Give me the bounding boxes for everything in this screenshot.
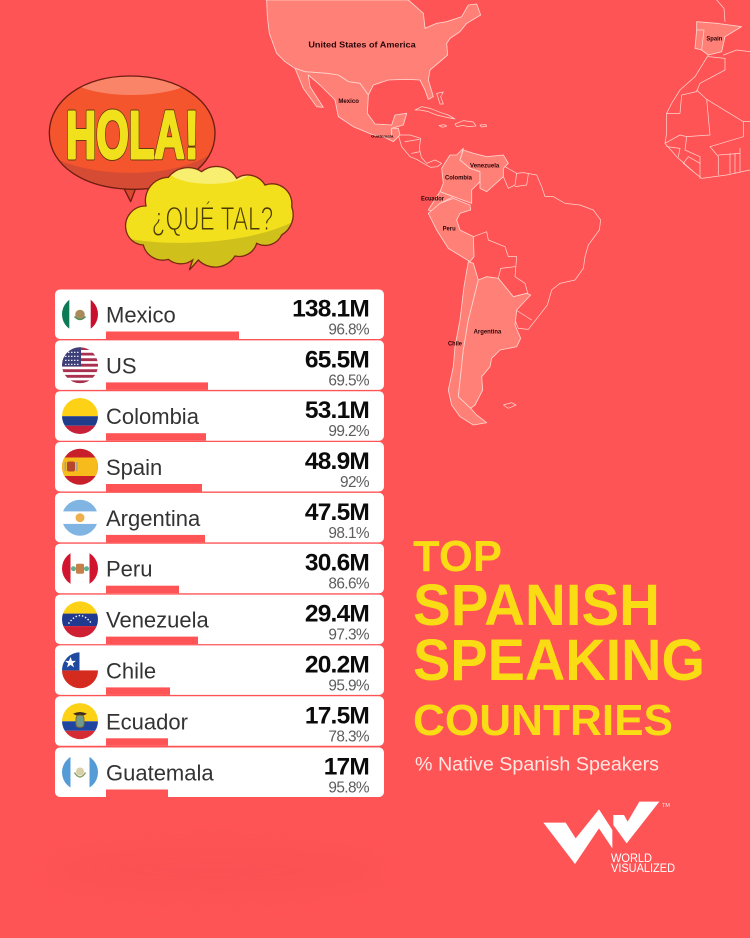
row: Spain: Spain <box>106 455 162 480</box>
label: Chile: Chile <box>448 341 463 347</box>
row: Peru: 30.6M <box>305 550 369 577</box>
label: Argentina: Argentina <box>474 329 502 335</box>
row: Peru: 86.6% <box>328 576 370 593</box>
row: Ecuador <box>55 696 384 746</box>
row: Peru: Peru <box>106 557 152 582</box>
unhighlighted country borders <box>266 0 750 408</box>
row: Mexico: 138.1M <box>292 296 369 322</box>
Peru <box>428 198 474 262</box>
map labels <box>308 36 723 347</box>
Argentina <box>458 277 531 408</box>
row: Guatemala: 17M <box>324 754 369 780</box>
row: Venezuela: 29.4M <box>305 601 369 628</box>
row: Chile: 20.2M <box>305 651 369 678</box>
bubble: Hola <box>48 75 216 202</box>
flag: Ecuador <box>62 702 98 741</box>
title line: SPEAKING: SPEAKING <box>413 628 705 693</box>
title line: COUNTRIES: COUNTRIES <box>413 696 673 745</box>
flag: Argentina <box>62 499 98 537</box>
row: Mexico: 96.8% <box>328 322 370 338</box>
row: Mexico: Mexico <box>106 302 176 328</box>
row: Spain: 92% <box>340 474 370 491</box>
map of the Americas and Spain <box>266 0 750 425</box>
row: Chile: Chile <box>106 658 156 683</box>
subtitle: % Native Spanish Speakers <box>415 754 659 776</box>
row: Colombia: 99.2% <box>328 423 370 440</box>
text: HOLA!: HOLA! <box>66 99 199 173</box>
row: US: 65.5M <box>305 346 369 373</box>
title line: TOP: TOP <box>413 532 502 581</box>
row: Colombia: 53.1M <box>305 397 369 424</box>
row: Ecuador: 17.5M <box>305 702 369 729</box>
Venezuela <box>460 150 508 192</box>
row: Argentina: Argentina <box>106 506 201 531</box>
Ecuador <box>428 192 453 212</box>
row: Argentina <box>55 493 384 542</box>
logo: World Visualized: VISUALIZED <box>611 863 675 875</box>
label: Venezuela: Venezuela <box>470 163 500 169</box>
row: Guatemala: 95.8% <box>328 780 370 796</box>
row: Peru <box>55 544 384 593</box>
flag: Peru <box>62 553 98 584</box>
row: Venezuela: 97.3% <box>328 627 370 644</box>
label: Colombia: Colombia <box>445 175 473 181</box>
row: US: US <box>106 353 137 378</box>
flag: Venezuela <box>62 601 98 639</box>
logo: World Visualized <box>543 802 675 875</box>
label: Mexico: Mexico <box>338 99 359 105</box>
title line: SPANISH: SPANISH <box>413 573 660 638</box>
text: Que tal: ¿QUÉ TAL? <box>152 201 273 238</box>
row: Colombia: Colombia <box>106 404 200 429</box>
Mexico <box>295 68 407 140</box>
row: US: 69.5% <box>328 372 370 389</box>
flag: Mexico <box>62 300 98 329</box>
row: US <box>55 340 384 390</box>
United States <box>267 0 481 99</box>
row: Chile: 95.9% <box>328 677 370 694</box>
title <box>413 532 705 745</box>
Spain <box>695 22 742 55</box>
Chile <box>448 262 487 425</box>
logo: World Visualized: TM <box>662 803 670 809</box>
flag: Chile <box>62 651 98 690</box>
row: Venezuela <box>55 595 384 644</box>
flag: US <box>62 346 98 384</box>
Guatemala <box>383 128 400 142</box>
label: Guatemala: Guatemala <box>371 134 394 139</box>
row: Spain: 48.9M <box>305 448 369 475</box>
row: Venezuela: Venezuela <box>106 608 210 633</box>
label: Spain: Spain <box>706 36 723 42</box>
row: Argentina: 98.1% <box>328 525 370 542</box>
row: Colombia <box>55 391 384 441</box>
label: Peru: Peru <box>443 226 456 232</box>
row: Spain <box>55 442 384 492</box>
logo: World Visualized: WORLD <box>611 853 652 865</box>
Colombia <box>440 148 480 203</box>
row: Guatemala: Guatemala <box>106 760 214 786</box>
bubble: Que tal <box>124 166 294 270</box>
row: Chile <box>55 645 384 695</box>
speech bubbles illustration <box>48 75 294 270</box>
ranking table <box>55 290 384 797</box>
flag: Guatemala <box>62 757 98 788</box>
label: Ecuador: Ecuador <box>421 197 445 203</box>
row: Mexico <box>55 290 384 339</box>
row: Ecuador: 78.3% <box>328 728 370 745</box>
label: United States of America: United States of America <box>308 39 416 49</box>
row: Argentina: 47.5M <box>305 499 369 526</box>
row: Ecuador: Ecuador <box>106 709 188 734</box>
text: HOLA! <box>66 99 199 173</box>
flag: Colombia <box>62 397 98 436</box>
flag: Spain <box>62 448 98 486</box>
row: Guatemala <box>55 748 384 797</box>
text: HOLA!: HOLA! <box>66 99 199 173</box>
faint shadow smudge <box>50 848 380 892</box>
